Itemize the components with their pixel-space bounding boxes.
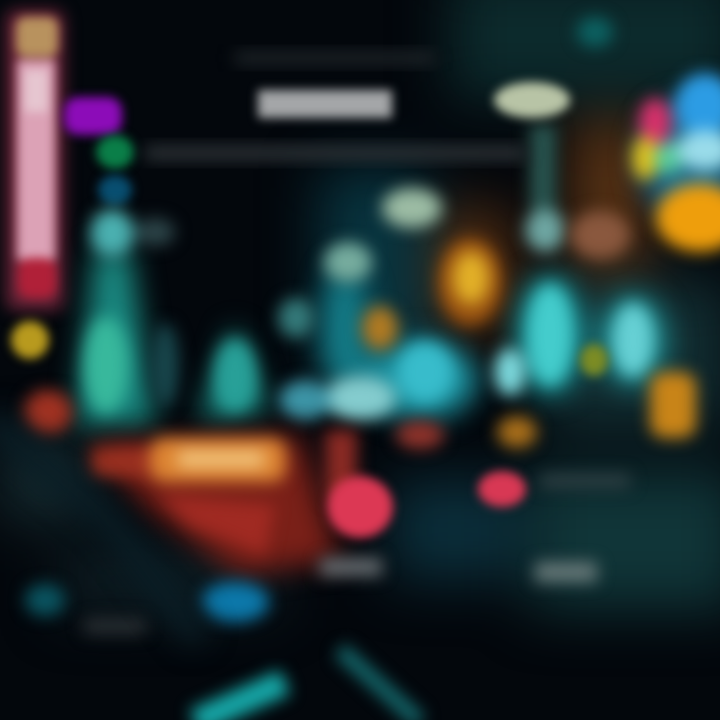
arrow: dark diagonal road edge (0, 420, 200, 640)
icon: brown glow (570, 211, 630, 259)
icon: amber glow (362, 306, 398, 350)
panel: glowing red street band (24, 390, 444, 575)
heading: blurred title (145, 52, 525, 160)
icon: blue bottom blob (201, 582, 269, 622)
panel: tall pink sign (6, 10, 64, 310)
icon: teal top blob (577, 17, 613, 47)
arrow: teal road stripe right (340, 650, 420, 720)
icon: orange lantern (438, 238, 502, 326)
chart: neon peaks (75, 125, 667, 425)
callout: top right label (494, 82, 570, 118)
icon: coral circle (327, 476, 393, 538)
icon: coral pill (478, 471, 526, 507)
icon: blue tag (98, 175, 132, 205)
text block: faint lower labels (84, 474, 630, 634)
icon: small teal blob (25, 584, 65, 616)
icon: olive square (580, 344, 608, 376)
icon: amber small (497, 416, 537, 448)
icon: rainbow sign (632, 73, 720, 252)
arrow: cyan road stripe left (195, 682, 285, 720)
icon: yellow dot (11, 321, 49, 359)
icon: amber panel (650, 372, 696, 438)
icon: green tag (96, 135, 134, 169)
icon: purple tag (64, 97, 122, 135)
